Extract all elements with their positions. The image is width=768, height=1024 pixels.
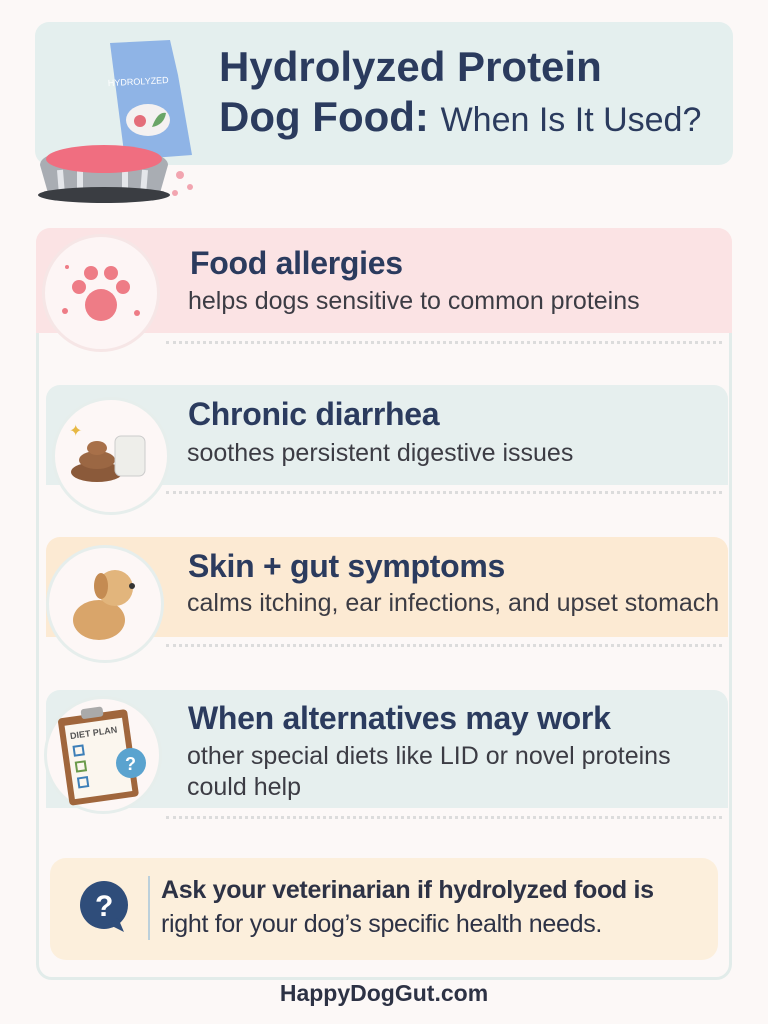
text: helps dogs sensitive to common proteins: [188, 287, 640, 315]
icon: question bubble: ?: [95, 890, 113, 923]
title: [219, 43, 701, 140]
panel: food allergies: [36, 228, 732, 352]
outer container: [36, 228, 732, 980]
panel: alternatives: [44, 690, 728, 819]
heading: When alternatives may work: [188, 700, 611, 736]
icon: food bag and bowl: HYDROLYZED: [108, 75, 169, 88]
callout text: Ask your veterinarian if hydrolyzed food is: [161, 876, 654, 904]
icon: poop: [52, 397, 170, 515]
text: could help: [187, 773, 301, 801]
icon: paw: [42, 234, 160, 352]
icon: diet plan clipboard: [44, 696, 162, 814]
callout text: right for your dog’s specific health needs.: [161, 910, 602, 938]
title: Hydrolyzed Protein: [219, 43, 602, 90]
heading: Skin + gut symptoms: [188, 548, 505, 584]
icon: food bag and bowl: [38, 40, 193, 203]
text: other special diets like LID or novel proteins: [187, 742, 671, 770]
panel: skin + gut: [46, 537, 728, 663]
callout: [50, 858, 718, 960]
footer: HappyDogGut.com: [280, 980, 488, 1006]
heading: Food allergies: [190, 245, 403, 281]
icon: diet plan clipboard: ?: [125, 754, 136, 774]
title: Dog Food: When Is It Used?: [219, 93, 701, 140]
panel: chronic diarrhea: [46, 385, 728, 515]
icon: scratching dog: [46, 545, 164, 663]
text: calms itching, ear infections, and upset stomach: [187, 589, 719, 617]
header panel: [35, 22, 733, 165]
icon: question bubble: [80, 881, 128, 932]
heading: Chronic diarrhea: [188, 396, 439, 432]
callout text: [161, 876, 654, 938]
icon: diet plan clipboard: DIET PLAN: [69, 725, 118, 741]
icon: poop: ✦: [69, 423, 82, 440]
text: soothes persistent digestive issues: [187, 439, 573, 467]
text: [187, 742, 671, 801]
